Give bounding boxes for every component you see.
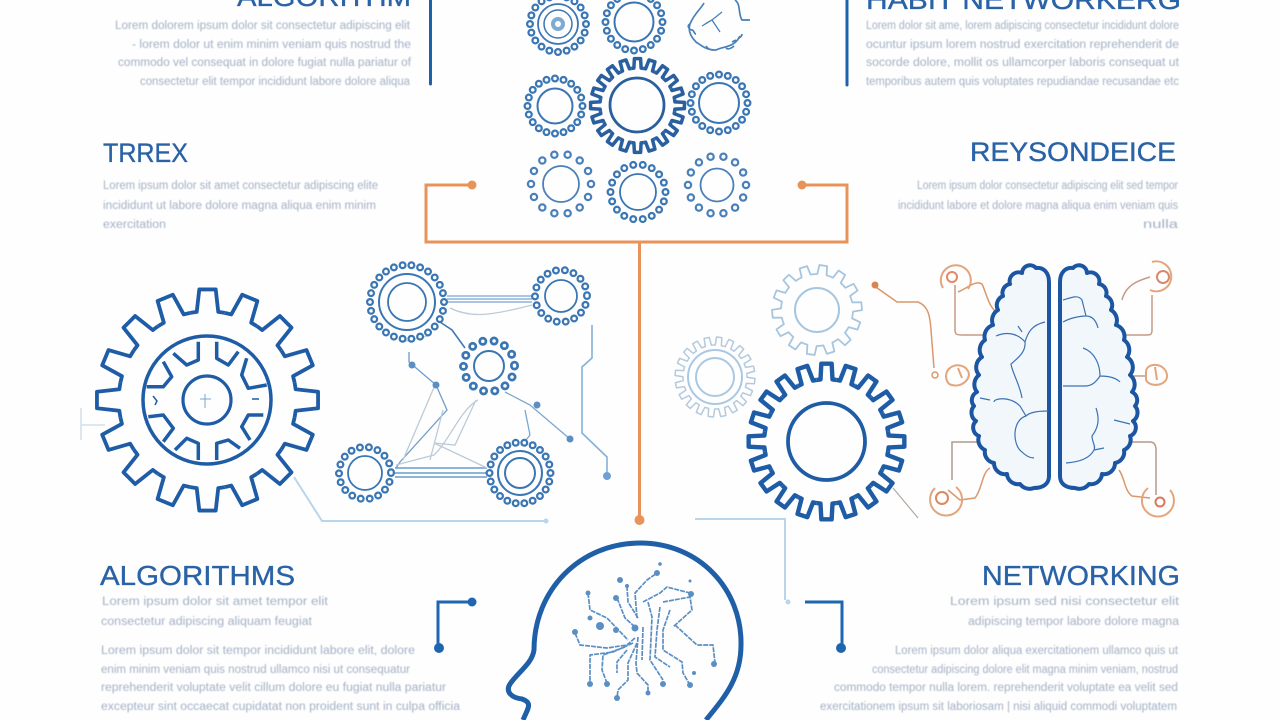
gear 2 (606, 0, 662, 50)
body text: exercitation (103, 219, 166, 231)
left veins (980, 322, 1048, 458)
body text: incididunt ut labore dolore magna aliqua enim minim (103, 200, 376, 212)
panel: trrex (103, 138, 378, 231)
body text: consectetur elit tempor incididunt labore dolore aliqua (140, 76, 411, 88)
body text: Lorem dolorem ipsum dolor sit consectetur adipiscing elit (115, 20, 411, 32)
head outline (508, 543, 741, 720)
panel: reysondeice (898, 137, 1179, 231)
icon: gear cluster network (294, 265, 611, 524)
gear 8 (610, 164, 666, 220)
light blue connector (695, 519, 785, 600)
body text: Lorem ipsum dolor aliqua exercitationem ullamco quis ut (895, 645, 1179, 657)
body text: Lorem ipsum sed nisi consectetur elit (950, 596, 1180, 608)
body text (103, 180, 378, 231)
icon: brain with orange circuits (872, 261, 1174, 517)
heading: reysondeice: REYSONDEICE (970, 137, 1176, 167)
body text: consectetur adipiscing dolore elit magna minim veniam, nostrud (872, 664, 1178, 676)
body text (820, 596, 1180, 713)
faint gear top (766, 259, 868, 361)
icon: large right gear (749, 364, 918, 519)
network links (294, 296, 607, 521)
body text: Lorem ipsum dolor consectetur adipiscing elit sed tempor (917, 180, 1178, 192)
gear 1 (530, 0, 586, 52)
body text: Lorem ipsum dolor sit tempor incididunt labore elit, dolore (101, 645, 415, 657)
circuit nodes (572, 562, 717, 701)
body text (115, 20, 412, 88)
body text: reprehenderit voluptate velit cillum dolore eu fugiat nulla pariatur (101, 682, 446, 694)
orange connector tree (426, 180, 847, 525)
orange circuit lines (872, 277, 1156, 500)
heading: networking: NETWORKING (982, 560, 1180, 591)
body text: incididunt labore et dolore magna aliqua enim veniam quis (898, 200, 1178, 212)
panel: networking (820, 560, 1180, 713)
body text: consectetur adipiscing aliquam feugiat (101, 616, 313, 628)
right veins (1063, 297, 1130, 463)
icon: head with circuit brain (508, 543, 741, 720)
body text: commodo tempor nulla lorem. reprehenderit voluptate ea velit sed (834, 682, 1178, 694)
node dots (408, 362, 611, 524)
heading: trrex: TRREX (103, 138, 188, 168)
left hemisphere (971, 265, 1049, 489)
accent line: top right (846, 0, 848, 85)
body text: commodo vel consequat in dolore fugiat nulla pariatur of (118, 57, 412, 69)
bracket: left (434, 598, 476, 653)
gear 3: broken (688, 0, 750, 50)
gear a (370, 265, 444, 339)
body text: ocuntur ipsum lorem nostrud exercitation reprehenderit de (866, 39, 1179, 51)
body text: adipiscing tempor labore dolore magna (968, 616, 1180, 628)
body text: socorde dolore, mollit os ullamcorper laboris consequat ut (866, 57, 1180, 69)
heading: algorithms: ALGORITHMS (100, 560, 295, 591)
body text (101, 596, 461, 713)
bracket: right (786, 600, 846, 653)
gear 5: main (591, 59, 684, 152)
body text: exercitationem ipsum sit laboriosam | nisi aliquid commodi voluptatem (820, 701, 1177, 713)
right hemisphere (1060, 265, 1138, 489)
body text: Lorem ipsum dolor sit amet consectetur adipiscing elite (103, 180, 378, 192)
body text: - lorem dolor ut enim minim veniam quis nostrud the (132, 39, 411, 51)
accent line: top left (429, 0, 432, 84)
body text (866, 20, 1180, 88)
icon: faint light gears (671, 259, 868, 421)
gear c (464, 340, 514, 392)
icon: large left gear (81, 289, 318, 511)
circuit traces (575, 573, 715, 698)
orange spiral circles (930, 261, 1174, 517)
body text: temporibus autem quis voluptates repudiandae recusandae etc (866, 76, 1179, 88)
faint gear left (671, 333, 759, 421)
body text: nulla (1143, 219, 1179, 231)
gear 6 (690, 74, 748, 132)
body text: excepteur sint occaecat cupidatat non proident sunt in culpa officia (101, 701, 461, 713)
gear b (535, 270, 587, 322)
body text (898, 180, 1179, 231)
panel: top left algorithm (115, 0, 412, 88)
body text: Lorem ipsum dolor sit amet tempor elit (102, 596, 329, 608)
panel: top right heading (866, 0, 1181, 88)
body text: Lorem dolor sit ame, lorem adipiscing consectetur incididunt dolore (866, 20, 1179, 32)
gear d (339, 447, 391, 499)
gear e (490, 442, 550, 504)
gear 9 (688, 156, 746, 214)
gear 4 (528, 78, 582, 134)
body text: enim minim veniam quis nostrud ullamco nisi ut consequatur (101, 664, 410, 676)
icon: top gear grid (528, 0, 750, 220)
panel: algorithms (100, 560, 461, 713)
gear 7 (531, 154, 591, 214)
